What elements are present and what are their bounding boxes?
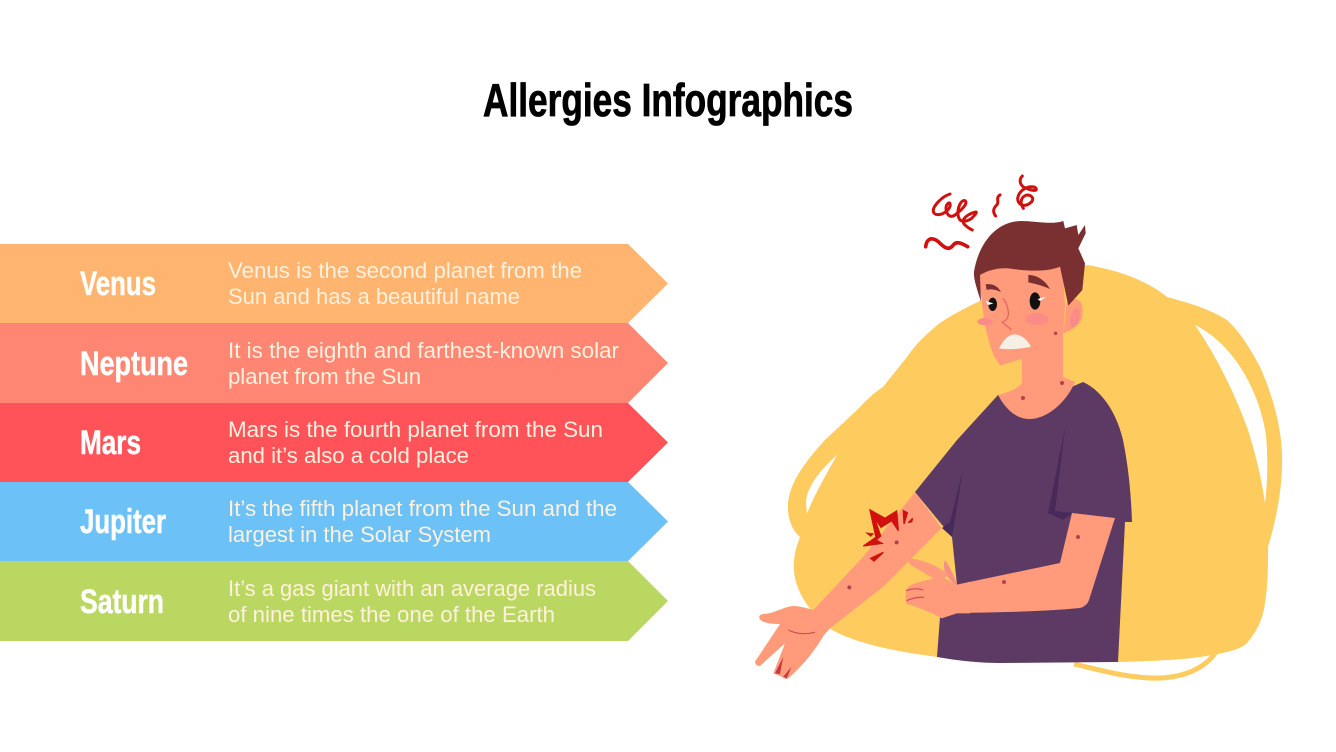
arrow row: Saturn xyxy=(0,561,668,641)
right highlight xyxy=(1195,325,1267,503)
palm crease xyxy=(788,630,815,634)
rash spots xyxy=(895,540,899,544)
illustration: man with skin allergy xyxy=(755,176,1282,679)
ear xyxy=(1063,299,1083,333)
scratch marks on fingers xyxy=(775,657,792,678)
face xyxy=(978,252,1065,366)
sleeve fold shadow xyxy=(942,470,963,537)
yellow blob background xyxy=(788,265,1282,678)
outstretched arm and hand xyxy=(755,492,942,679)
neck rash spots xyxy=(1021,381,1064,400)
arrow row: Mars xyxy=(0,403,668,482)
cheeks xyxy=(977,318,993,325)
eyebrows xyxy=(986,275,1050,292)
arrow row: Jupiter: largest in the Solar System xyxy=(228,522,491,547)
arrow row: Saturn: It’s a gas giant with an average radius xyxy=(228,576,596,601)
shirt fold shadow xyxy=(1048,428,1072,520)
arrow row: Venus: Venus xyxy=(80,265,156,303)
neck and collar xyxy=(998,320,1075,419)
thumb xyxy=(944,560,957,585)
arrow row: Neptune: It is the eighth and farthest-known solar xyxy=(228,338,619,363)
hair xyxy=(974,221,1086,306)
arrow row: Saturn: Saturn xyxy=(80,583,164,621)
arrow row: Neptune xyxy=(0,323,668,403)
scratching arm and hand xyxy=(906,513,1115,618)
eyes xyxy=(988,298,997,311)
head xyxy=(974,221,1086,366)
fist xyxy=(906,577,970,618)
arrow row: Mars: Mars xyxy=(80,424,141,462)
left highlight xyxy=(806,455,837,514)
arrow row: Neptune: Neptune xyxy=(80,345,188,383)
finger lines xyxy=(906,589,924,601)
arrow row: Jupiter: It’s the fifth planet from the Sun and the xyxy=(228,496,617,521)
rash spot xyxy=(1054,332,1057,335)
arrow row: Jupiter xyxy=(0,482,668,561)
arrow row: Mars: Mars is the fourth planet from the Sun xyxy=(228,417,603,442)
icon: irritation squiggles xyxy=(926,176,1036,248)
arrow row: Neptune: planet from the Sun xyxy=(228,364,421,389)
arrow row: Venus: Venus is the second planet from the xyxy=(228,258,582,283)
arrow row: Venus: Sun and has a beautiful name xyxy=(228,284,520,309)
nose xyxy=(1002,298,1012,330)
panel: planet arrows xyxy=(0,244,668,641)
bottom loop line xyxy=(1074,652,1216,678)
mouth xyxy=(999,334,1031,349)
arrow row: Saturn: of nine times the one of the Earth xyxy=(228,602,555,627)
arrow row: Jupiter: Jupiter xyxy=(80,503,166,541)
title: Allergies Infographics xyxy=(483,74,853,126)
arrow row: Mars: and it’s also a cold place xyxy=(228,443,469,468)
arrow row: Venus xyxy=(0,244,668,323)
t-shirt xyxy=(915,382,1132,663)
rash spots xyxy=(1002,580,1006,584)
icon: red pain burst xyxy=(863,510,913,561)
pointing finger xyxy=(909,559,949,582)
